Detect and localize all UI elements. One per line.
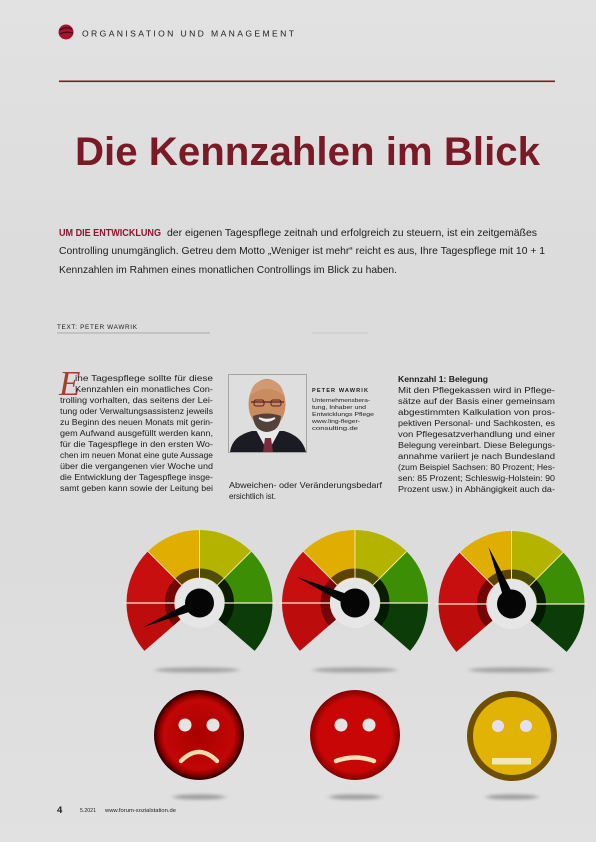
title: Die Kennzahlen im Blick: [75, 130, 541, 174]
text column 3: sen: 85 Prozent; Schleswig-Holstein: 90: [398, 474, 556, 483]
smiley shadows: [173, 794, 538, 800]
text column 1: samt geben kann sowie der Leitung bei: [60, 484, 213, 493]
smiley 2: sad: [310, 690, 400, 780]
text column 3: [398, 375, 556, 494]
section header: [58, 24, 295, 40]
text column 1: ine Tagespflege sollte für diese: [75, 374, 214, 383]
text column 3: pektiven Personal- und Sachkosten, es: [398, 419, 555, 428]
author bio: tung, Inhaber und: [312, 405, 366, 411]
lead paragraph: der eigenen Tagespflege zeitnah und erfolgreich zu steuern, ist ein zeitgemäßes: [167, 228, 537, 239]
smiley 1: very sad: [154, 690, 244, 780]
page number: 4: [57, 805, 63, 816]
text column 3: sätze auf der Basis einer gemeinsam: [398, 397, 555, 406]
drop cap: E: [58, 364, 80, 403]
text column 3: Prozent usw.) in Abhängigkeit auch da-: [398, 485, 555, 494]
icon: section bullet: [58, 24, 74, 40]
author bio: consulting.de: [312, 426, 358, 432]
text column 1: [58, 364, 214, 493]
author bio: www.ling-fleger-: [311, 419, 360, 425]
website: www.forum-sozialstation.de: [105, 808, 176, 814]
footer: [57, 805, 176, 816]
gauge 3: needle in yellow: [436, 530, 588, 652]
lead paragraph: UM DIE ENTWICKLUNG: [59, 228, 161, 239]
text column 3: Belegung vereinbart. Diese Belegungs-: [398, 441, 555, 450]
text column 1: die Entwicklung der Tagespflege insge-: [60, 473, 213, 482]
text column 1: tung oder Verwaltungsassistenz jeweils: [60, 407, 213, 416]
text column 3: (zum Beispiel Sachsen: 80 Prozent; Hes-: [398, 463, 555, 472]
text column 3: von Pflegesatzverhandlung und einer: [398, 430, 555, 439]
smiley 3: neutral: [467, 691, 557, 781]
text column 3: annahme variiert je nach Bundesland: [398, 452, 555, 461]
byline: TEXT: PETER WAWRIK: [57, 324, 138, 331]
text column 1: gem Aufwand ausgefüllt werden kann,: [60, 429, 213, 438]
text column 3: Kennzahl 1: Belegung: [398, 375, 488, 384]
needle: [297, 577, 357, 608]
text column 2: Abweichen- oder Veränderungsbedarf: [229, 481, 383, 490]
text column 1: trolling vorhalten, das seitens der Lei-: [60, 396, 213, 405]
lead paragraph: Kennzahlen im Rahmen eines monatlichen Controllings im Blick zu haben.: [59, 265, 397, 276]
gauge 1: needle in red: [124, 529, 276, 651]
text column 1: zu Beginn des neuen Monats mit gerin-: [60, 418, 213, 427]
gauge shadows: [155, 667, 553, 673]
lead paragraph: Controlling unumgänglich. Getreu dem Motto „Weniger ist mehr“ reicht es aus, Ihre Tagespflege mit 10 + 1: [59, 246, 545, 257]
text column 1: über die vergangenen vier Woche und: [60, 462, 213, 471]
text column 2: [229, 481, 383, 501]
needle: [144, 598, 201, 627]
author bio: PETER WAWRIK: [312, 388, 368, 394]
issue: 5.2021: [80, 808, 96, 814]
header rule: [59, 80, 555, 82]
section label: ORGANISATION UND MANAGEMENT: [82, 28, 295, 38]
author bio: Unternehmensbera-: [312, 398, 370, 404]
text column 1: für die Tagespflege in den ersten Wo-: [60, 440, 213, 449]
text column 3: Mit den Pflegekassen wird in Pflege-: [398, 386, 555, 395]
author bio: [311, 388, 374, 432]
text column 2: ersichtlich ist.: [229, 492, 276, 501]
needle: [488, 547, 517, 606]
author bio: Entwicklungs Pflege: [312, 412, 374, 418]
author portrait: [228, 374, 306, 452]
gauge 2: needle in upper red: [279, 529, 431, 651]
lead paragraph: [59, 228, 545, 276]
text column 1: Kennzahlen ein monatliches Con-: [75, 385, 213, 394]
text column 3: abgestimmten Kalkulation von pros-: [398, 408, 555, 417]
text column 1: chen im neuen Monat eine gute Aussage: [60, 451, 214, 460]
